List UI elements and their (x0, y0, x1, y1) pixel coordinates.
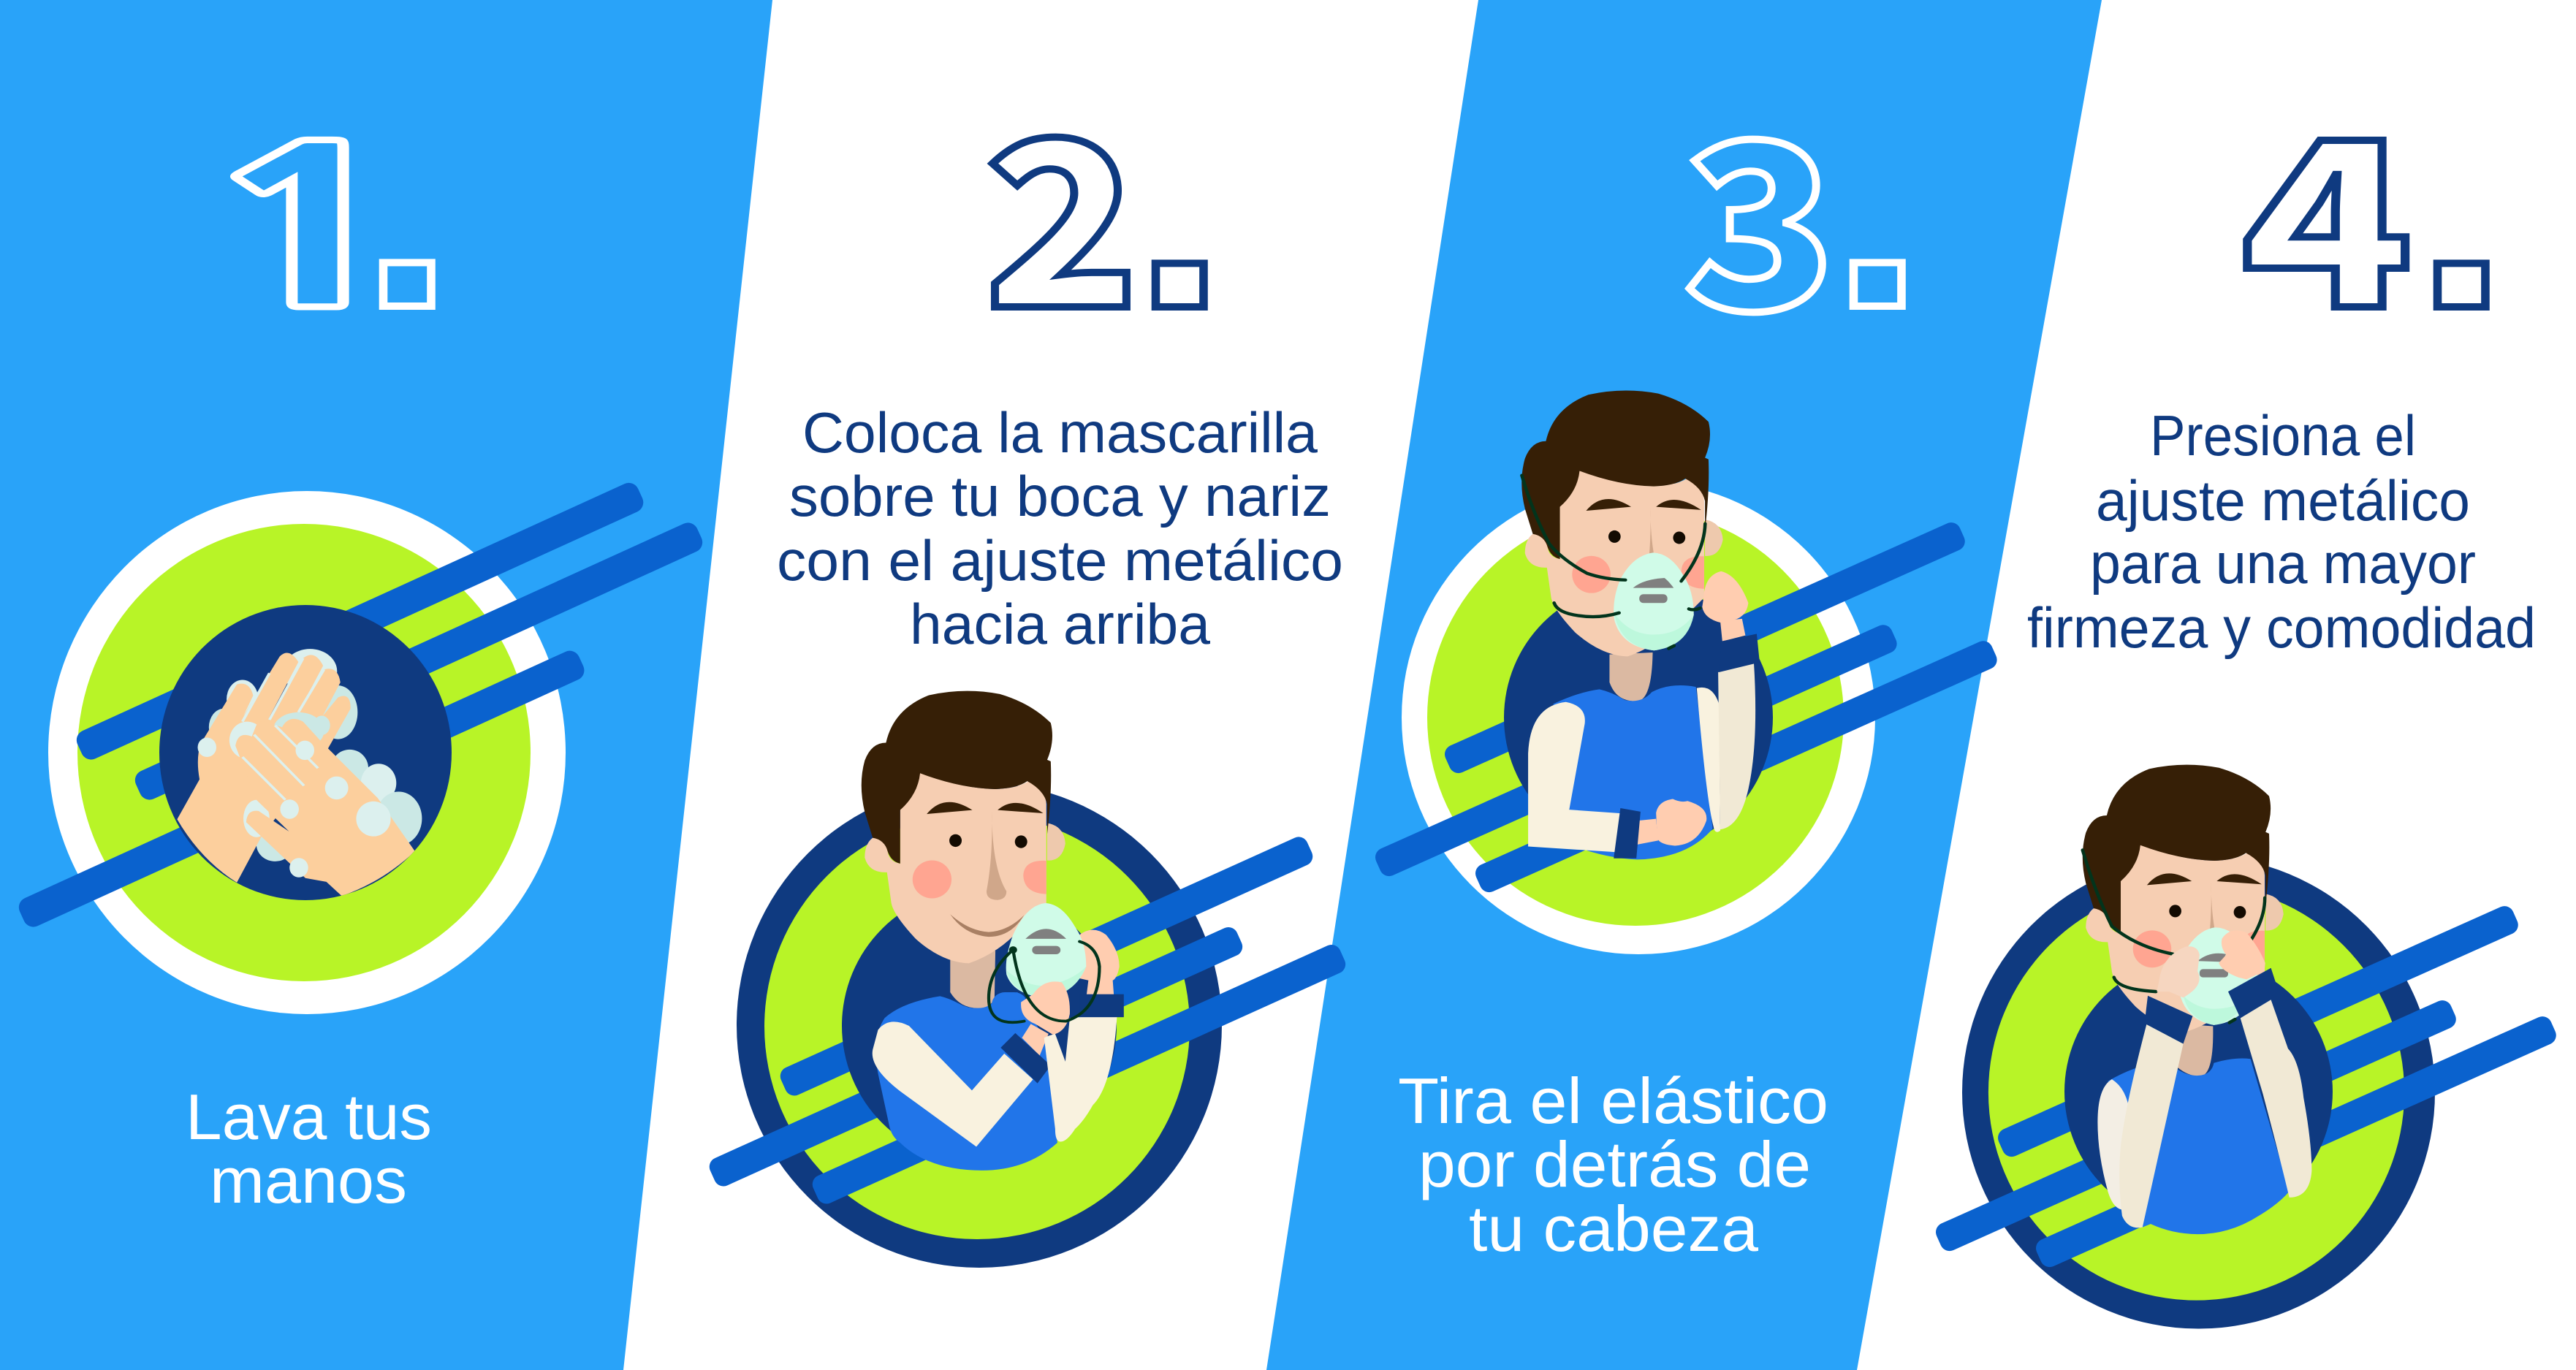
panel: step 4 (1933, 42, 2559, 1328)
illustration: man head (2083, 765, 2284, 1031)
caption: step 1 (186, 1081, 432, 1217)
icon: circle badge with man pressing mask (1933, 765, 2559, 1328)
icon: circle badge with hand washing (15, 479, 706, 1014)
number 4 (2241, 42, 2509, 373)
illustration: mask, hands and sleeves (2083, 850, 2311, 1228)
number 1: . (360, 42, 455, 368)
panel: step 3 (1372, 42, 2000, 1265)
instructions: step 2: sobre tu boca y nariz (789, 464, 1331, 528)
panel: step 2 (707, 41, 1348, 1268)
illustration: man holding mask (862, 691, 1124, 1171)
number 1 (197, 42, 455, 368)
illustration: man torso and arms (1528, 652, 1755, 859)
instructions: step 4: para una mayor (2090, 531, 2476, 595)
number 4: . (2414, 42, 2509, 369)
instructions: step 2: Coloca la mascarilla (802, 400, 1318, 465)
background: blue slanted column 3 (1266, 0, 2102, 1370)
instructions: step 4: firmeza y comodidad (2027, 595, 2536, 660)
caption: step 1: manos (210, 1144, 407, 1217)
caption: step 3: tu cabeza (1469, 1192, 1758, 1265)
illustration: man head (1521, 391, 1723, 656)
caption: step 1: Lava tus (186, 1081, 432, 1153)
instructions: step 2 (777, 400, 1343, 656)
caption: step 3 (1398, 1065, 1828, 1265)
number 1: 1 (197, 123, 423, 338)
instructions: step 4: Presiona el (2150, 403, 2416, 468)
number 2: . (1133, 42, 1227, 369)
instructions: step 2: hacia arriba (910, 592, 1211, 656)
number 3 (1684, 42, 1925, 376)
panel: step 1 (15, 42, 706, 1217)
caption: step 3: por detrás de (1418, 1128, 1811, 1200)
instructions: step 4 (2027, 403, 2536, 660)
background: blue slanted column 1 (0, 0, 772, 1370)
number 2 (984, 41, 1227, 373)
number 2: 2 (984, 41, 1139, 373)
illustration: man torso (2097, 1024, 2290, 1234)
number 4: 4 (2241, 42, 2412, 373)
number 3: . (1831, 42, 1925, 368)
instructions: step 4: ajuste metálico (2096, 468, 2470, 533)
instructions: step 2: con el ajuste metálico (777, 528, 1343, 593)
icon: circle badge with man adjusting elastic (1372, 391, 2000, 954)
caption: step 3: Tira el elástico (1398, 1065, 1828, 1137)
icon: circle badge with man placing mask (707, 691, 1348, 1268)
number 3: 3 (1684, 43, 1836, 376)
illustration: mask, raised hand and elastic (1521, 476, 1760, 672)
illustration: soapy hands (177, 649, 422, 896)
